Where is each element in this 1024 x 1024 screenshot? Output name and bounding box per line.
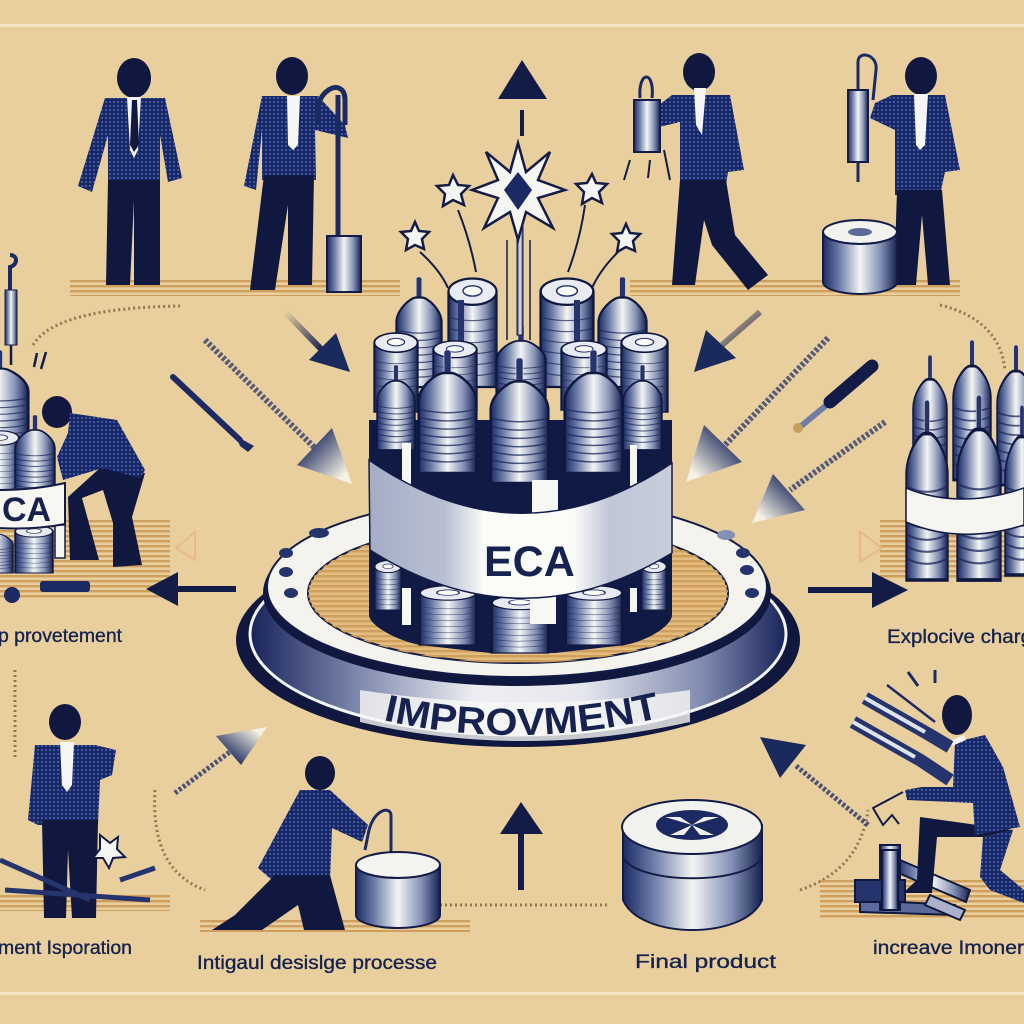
icon: final product box <box>622 800 762 930</box>
arrow: left <box>146 572 236 606</box>
person: top left standing <box>78 58 182 285</box>
syringes <box>865 698 950 747</box>
floor hatching <box>0 280 1024 932</box>
person: kneeling center left <box>212 756 440 930</box>
person: top left with tool <box>244 57 361 292</box>
label: final product: Final product <box>635 952 777 973</box>
left group: ECA cans and worker <box>0 255 145 603</box>
arrow: top up <box>498 60 547 136</box>
arrow: right <box>808 572 908 608</box>
tool pile <box>855 845 970 920</box>
arrow: lower right diagonal <box>760 737 868 825</box>
right group: cans <box>906 340 1024 580</box>
arrow: bottom up <box>500 802 543 890</box>
arrow: lower left diagonal <box>175 727 267 793</box>
person: top right with syringe <box>823 55 960 294</box>
person: kneeling right with tools <box>853 670 1024 920</box>
arrows pointing to center <box>205 312 885 523</box>
center: band label IMPROVMENT: IMPROVMENT <box>386 692 656 736</box>
label: left process: p provetement <box>0 626 123 647</box>
icon: screwdriver right <box>793 366 872 433</box>
center: ECA label: ECA <box>484 538 575 586</box>
person: top right with canister <box>624 53 768 290</box>
label: increase improvement: increave Imoner <box>873 938 1024 959</box>
white vertical straps <box>402 443 637 625</box>
label: explosive charge: Explocive charg <box>887 627 1024 648</box>
side and front canisters <box>377 350 662 483</box>
person: bottom left standing <box>0 704 155 918</box>
center: star burst and sparks <box>401 143 640 340</box>
center: base ring <box>236 497 800 747</box>
label: integral design process: Intigaul desislge processe <box>197 953 437 974</box>
back row canisters <box>374 277 668 412</box>
center: canister cluster <box>369 277 672 653</box>
lower canisters <box>375 561 666 653</box>
small hollow arrows <box>176 532 882 562</box>
label: implement isporation: ment Isporation <box>0 938 132 959</box>
dashed connectors <box>15 305 1005 905</box>
left ECA label: CA <box>2 491 51 529</box>
icon: wrench left <box>173 377 254 452</box>
